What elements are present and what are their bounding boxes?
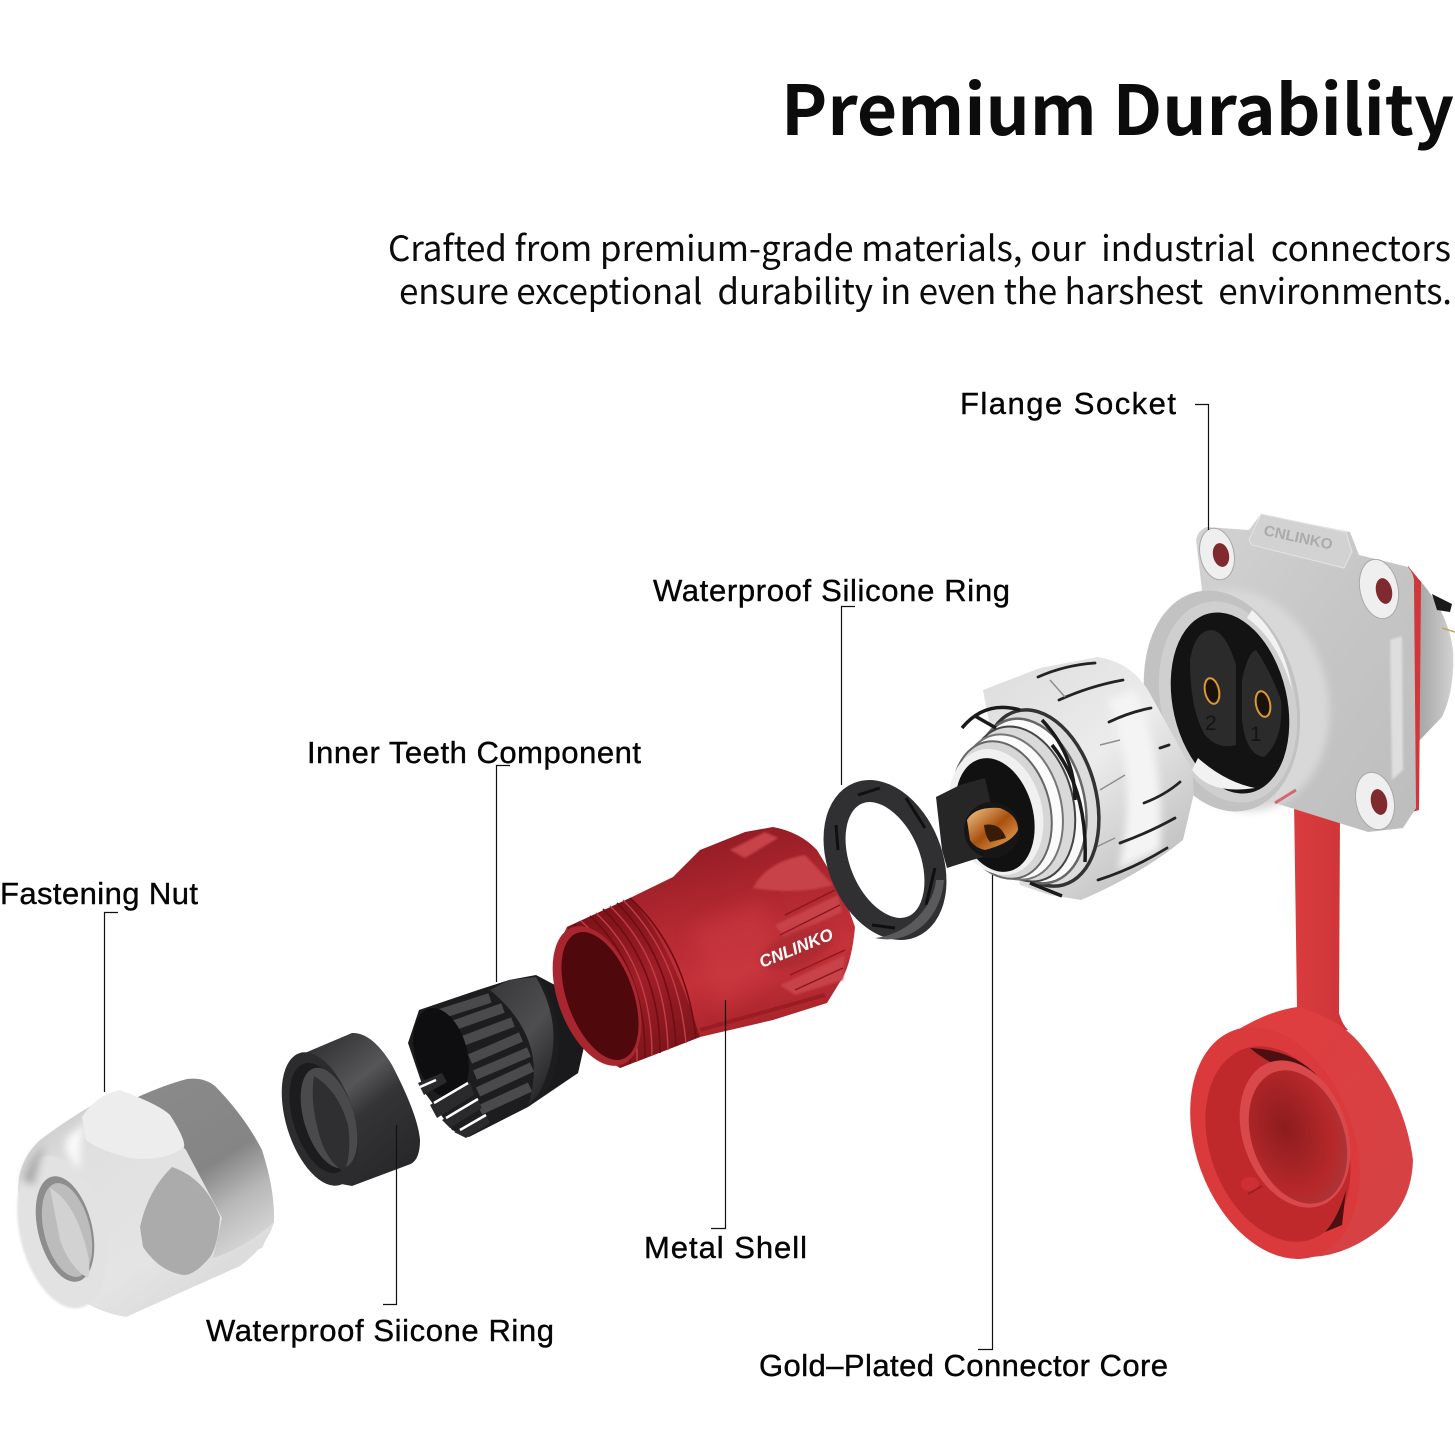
part: flange socket (1123, 514, 1455, 833)
label: Gold-Plated Connector Core: Gold–Plated Connector Core (759, 1348, 1168, 1383)
socket cavity (1154, 601, 1306, 805)
shell grips (730, 832, 845, 995)
teeth gaps (420, 1080, 486, 1130)
rear dome (1415, 575, 1453, 742)
gold pins (1202, 677, 1222, 705)
label: Metal Shell (644, 1000, 807, 1265)
part: fastening nut (2, 1079, 274, 1318)
core black housing (943, 749, 1047, 881)
label: Waterproof Silicone Ring (upper): Waterproof Silicone Ring (653, 573, 1010, 608)
part: inner teeth component (404, 975, 587, 1138)
cap cavity (1180, 1026, 1376, 1262)
socket insert 1 (1242, 650, 1281, 757)
socket insert 2 (1190, 630, 1236, 746)
cap inner ring (1220, 1045, 1370, 1223)
collar dark reflections (962, 707, 1085, 896)
cap face (1160, 1003, 1390, 1283)
cap band (1222, 1007, 1413, 1257)
label: Gold-Plated Connector Core (759, 875, 1168, 1383)
shell body highlight (690, 900, 790, 1010)
mounting holes (1195, 525, 1404, 833)
front collar (1129, 571, 1351, 829)
tab logo: CNLINKO (1262, 522, 1335, 554)
teeth ribs (440, 998, 532, 1110)
pin number 2: 2 (1205, 712, 1217, 735)
collar flutes (1038, 663, 1180, 880)
label: Inner Teeth Component: Inner Teeth Component (307, 735, 641, 770)
label: Fastening Nut (0, 876, 198, 1092)
mounting plate (1180, 514, 1416, 832)
logo tab (1249, 514, 1352, 568)
strap (1294, 800, 1348, 1035)
teeth prongs (418, 1073, 490, 1138)
nut front body (18, 1091, 274, 1317)
label: Inner Teeth Component (307, 735, 641, 982)
label: Metal Shell: Metal Shell (644, 1230, 807, 1265)
red gasket (1408, 566, 1421, 812)
part: gold-plated connector core and silver collar (935, 657, 1194, 900)
teeth hole (404, 1002, 478, 1104)
shell threaded end (567, 898, 700, 1068)
label: Flange Socket: Flange Socket (960, 386, 1176, 421)
nut side flat (140, 1167, 220, 1275)
cap peg (1241, 1177, 1259, 1191)
shell logo: CNLINKO (756, 925, 836, 972)
title: Premium Durability (781, 55, 1454, 155)
sleeve bore (278, 1055, 364, 1181)
collar threads (963, 697, 1117, 899)
nut top flat (82, 1090, 184, 1159)
label: Waterproof Silicone Ring (upper) (653, 573, 1010, 785)
part: waterproof silicone sleeve (267, 1033, 420, 1195)
part: waterproof silicone ring (815, 776, 955, 944)
description text (388, 221, 1452, 315)
part: red metal shell (535, 827, 855, 1078)
cavity crescents (1192, 610, 1292, 790)
label: Waterproof Siicone Ring (lower): Waterproof Siicone Ring (206, 1313, 554, 1348)
gold contact (967, 808, 1018, 850)
nut bore (26, 1170, 104, 1288)
plate highlight (1390, 636, 1403, 780)
label: Fastening Nut: Fastening Nut (0, 876, 198, 911)
description line 1: Crafted from premium-grade materials, our industrial connectors (388, 221, 1451, 272)
pin number 1: 1 (1250, 723, 1262, 746)
shell opening (535, 914, 659, 1078)
collar body (983, 657, 1194, 900)
nut rear ring (125, 1079, 274, 1266)
label: Flange Socket (960, 386, 1208, 530)
description line 2: ensure exceptional durability in even the harshest environments. (399, 264, 1452, 315)
part: flange socket strap and cap (1160, 800, 1413, 1283)
label: Waterproof Siicone Ring (lower) (206, 1125, 554, 1348)
